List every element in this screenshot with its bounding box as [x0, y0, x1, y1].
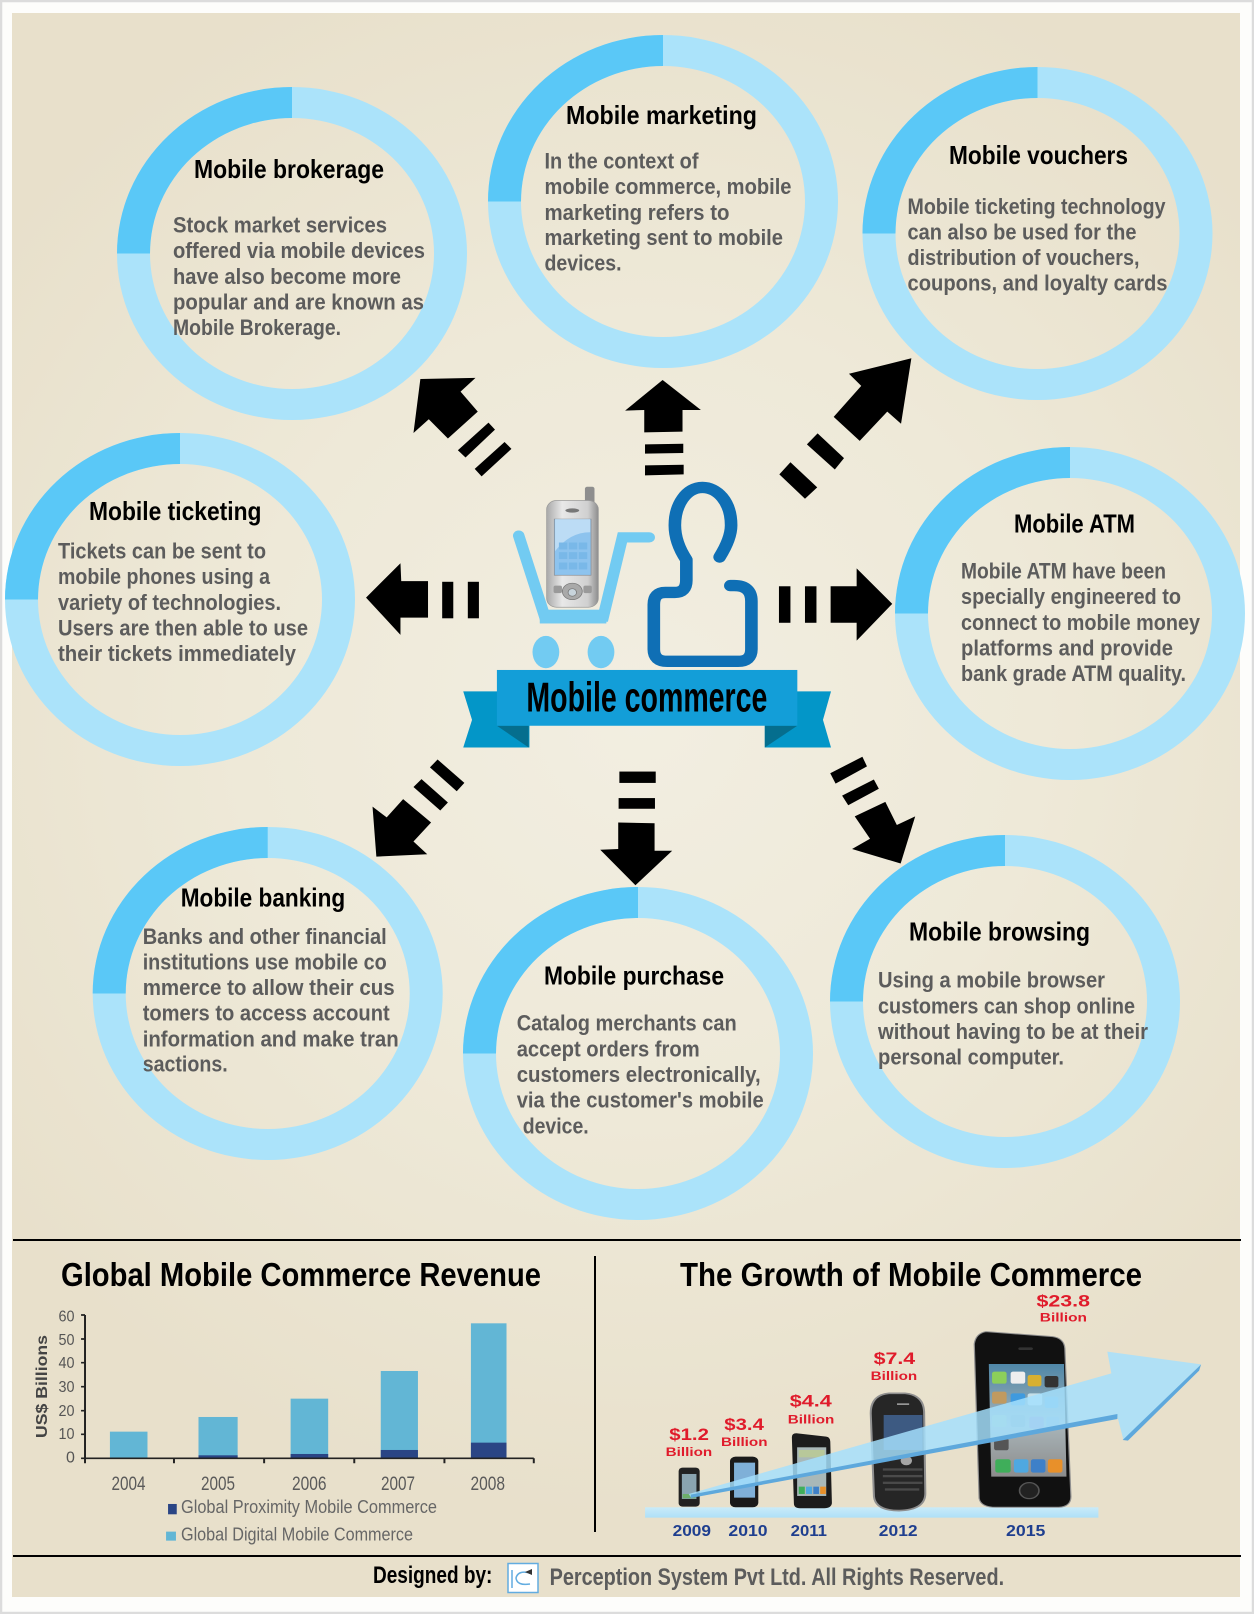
ring	[862, 67, 1212, 400]
year labels	[673, 1523, 1046, 1540]
panel: mobile banking	[93, 827, 443, 1160]
description: mmerce to allow their cus	[143, 975, 395, 1000]
description: platforms and provide	[961, 635, 1173, 660]
y axis labels: 0	[66, 1450, 75, 1467]
legend labels	[181, 1497, 437, 1545]
description	[544, 148, 792, 276]
description	[961, 558, 1201, 686]
description: Banks and other financial	[143, 924, 387, 949]
description: sactions.	[143, 1052, 228, 1077]
description: institutions use mobile co	[143, 949, 387, 974]
description: devices.	[544, 251, 622, 276]
arrow: south-east	[830, 757, 915, 864]
heading: Mobile brokerage	[194, 154, 384, 184]
phone growth illustration	[645, 1332, 1201, 1518]
description: Users are then able to use	[58, 615, 308, 640]
arrow: south	[600, 772, 672, 885]
axes	[81, 1315, 534, 1463]
description: customers electronically,	[517, 1062, 761, 1087]
value labels: Billion	[666, 1445, 712, 1459]
description	[143, 924, 399, 1077]
description: have also become more	[173, 264, 401, 289]
arrow: north-west	[413, 378, 511, 476]
y axis labels: 20	[58, 1403, 75, 1420]
ring	[488, 35, 838, 368]
y axis title: US$ Billions	[34, 1335, 51, 1438]
panel: mobile ticketing	[5, 433, 355, 766]
footer	[373, 1562, 1004, 1592]
value labels	[666, 1292, 1090, 1459]
x axis labels: 2006	[292, 1474, 326, 1495]
value labels: Billion	[871, 1369, 917, 1383]
description: Catalog merchants can	[517, 1011, 737, 1036]
value labels: Billion	[788, 1412, 834, 1426]
central title: Mobile commerce	[526, 673, 767, 720]
description: In the context of	[544, 148, 699, 173]
value labels: $23.8	[1036, 1292, 1090, 1311]
x axis labels: 2008	[470, 1474, 505, 1495]
arrow: north-east	[779, 358, 911, 499]
icon: phone 2012	[871, 1393, 925, 1511]
description: mobile commerce, mobile	[544, 174, 792, 199]
description: without having to be at their	[877, 1019, 1148, 1044]
value labels: Billion	[1040, 1311, 1087, 1325]
icon: shopping cart	[519, 536, 649, 668]
description: marketing sent to mobile	[544, 225, 783, 250]
description	[517, 1011, 764, 1138]
heading: Mobile vouchers	[949, 140, 1128, 170]
bars 2004-2008	[110, 1323, 507, 1458]
year labels: 2010	[728, 1523, 768, 1540]
icon: company logo	[508, 1564, 538, 1592]
icon: person outline	[654, 487, 751, 661]
description	[908, 194, 1168, 296]
x axis labels: 2007	[381, 1474, 415, 1495]
description: Using a mobile browser	[878, 968, 1105, 993]
value labels: Billion	[721, 1435, 768, 1449]
y axis labels: 10	[58, 1426, 75, 1443]
description: popular and are known as	[173, 290, 424, 314]
ring	[895, 447, 1245, 780]
value labels: $3.4	[724, 1415, 765, 1434]
y axis labels: 60	[58, 1309, 75, 1326]
legend swatches	[166, 1504, 177, 1541]
arrow: north	[625, 380, 701, 475]
icon: phone 2010	[730, 1457, 758, 1507]
description: via the customer's mobile	[517, 1088, 764, 1113]
description	[173, 213, 425, 340]
description: distribution of vouchers,	[908, 245, 1140, 270]
description: customers can shop online	[878, 993, 1135, 1018]
description: offered via mobile devices	[173, 238, 425, 263]
y axis labels	[58, 1309, 75, 1467]
icon: mobile phone	[547, 487, 598, 607]
description: marketing refers to	[544, 200, 730, 225]
year labels: 2012	[879, 1523, 918, 1540]
description: personal computer.	[878, 1045, 1064, 1070]
heading: Global Mobile Commerce Revenue	[61, 1256, 541, 1293]
arrow: east	[779, 568, 892, 641]
description: can also be used for the	[908, 219, 1136, 244]
panel: mobile ATM	[895, 447, 1245, 780]
description: bank grade ATM quality.	[961, 661, 1186, 686]
description: information and make tran	[143, 1027, 399, 1052]
ring	[5, 433, 355, 766]
panel: mobile purchase	[463, 887, 813, 1220]
section divider lines	[13, 1239, 1241, 1557]
ring	[117, 87, 467, 420]
x axis labels: 2005	[201, 1474, 235, 1495]
description: their tickets immediately	[58, 641, 297, 666]
copyright text: Perception System Pvt Ltd. All Rights Reserved.	[550, 1564, 1004, 1591]
description: mobile phones using a	[58, 564, 271, 589]
description: coupons, and loyalty cards	[908, 271, 1168, 296]
legend labels: Global Proximity Mobile Commerce	[181, 1497, 437, 1517]
description: accept orders from	[517, 1037, 700, 1062]
year labels: 2015	[1006, 1523, 1046, 1540]
x axis labels: 2004	[112, 1474, 146, 1495]
panel: mobile vouchers	[862, 67, 1212, 400]
description: tomers to access account	[143, 1001, 390, 1026]
heading: The Growth of Mobile Commerce	[680, 1256, 1142, 1293]
description: Stock market services	[173, 213, 387, 238]
heading: Mobile browsing	[909, 916, 1090, 946]
designed by label: Designed by:	[373, 1562, 492, 1589]
description	[877, 968, 1148, 1070]
ring	[463, 887, 813, 1220]
description: Mobile ticketing technology	[908, 194, 1166, 219]
arrow: south-west	[373, 760, 464, 857]
panel: mobile browsing	[830, 835, 1180, 1168]
bar chart	[34, 1309, 534, 1545]
heading: Mobile ticketing	[89, 496, 262, 526]
heading: Mobile purchase	[544, 960, 724, 990]
panel: global mobile commerce revenue	[34, 1256, 541, 1545]
panel: mobile brokerage	[117, 87, 467, 420]
value labels: $7.4	[874, 1349, 916, 1368]
value labels: $4.4	[790, 1392, 832, 1411]
year labels: 2009	[673, 1523, 711, 1540]
icon: phone 2015	[974, 1332, 1071, 1507]
heading: Mobile banking	[181, 883, 345, 913]
description: variety of technologies.	[58, 590, 281, 615]
value labels: $1.2	[669, 1425, 709, 1444]
description: Mobile ATM have been	[961, 558, 1166, 583]
year labels: 2011	[791, 1523, 827, 1540]
description: device.	[523, 1113, 589, 1138]
ring	[830, 835, 1180, 1168]
floor band	[645, 1507, 1098, 1518]
heading: Mobile ATM	[1014, 508, 1135, 538]
y axis labels: 50	[58, 1332, 75, 1349]
description: connect to mobile money	[961, 610, 1201, 635]
y axis labels: 40	[58, 1355, 75, 1372]
legend labels: Global Digital Mobile Commerce	[181, 1525, 413, 1545]
ribbon banner	[463, 670, 831, 747]
panel: mobile marketing	[488, 35, 838, 368]
central hub: arrows, icons and ribbon shapes	[366, 358, 915, 885]
y axis labels: 30	[58, 1379, 75, 1396]
description: Tickets can be sent to	[58, 538, 266, 563]
description: Mobile Brokerage.	[173, 315, 341, 340]
heading: Mobile marketing	[566, 100, 757, 130]
description	[58, 538, 308, 666]
icon: phone 2009	[679, 1468, 700, 1507]
x axis labels	[112, 1474, 505, 1495]
growth arrow	[689, 1352, 1201, 1498]
arrow: west	[366, 563, 479, 635]
icon: phone 2011	[792, 1433, 832, 1508]
panel: the growth of mobile commerce	[645, 1256, 1201, 1540]
ring	[93, 827, 443, 1160]
description: specially engineered to	[961, 584, 1181, 609]
